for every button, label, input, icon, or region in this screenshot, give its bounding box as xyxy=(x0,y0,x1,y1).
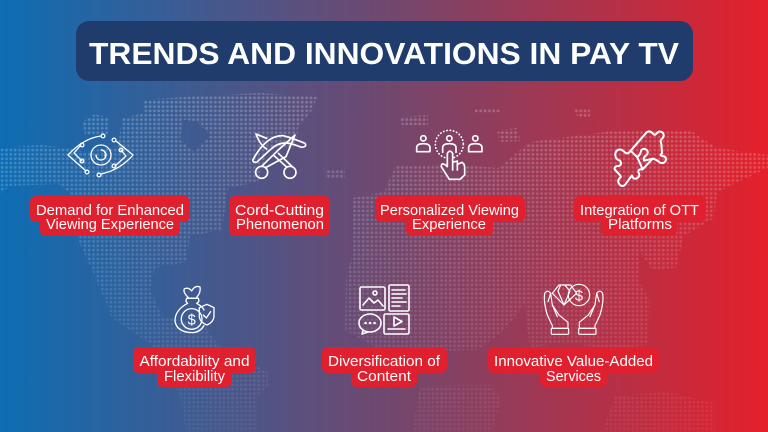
label: Experience xyxy=(412,217,486,233)
icon: hands holding gem and coin: $ xyxy=(575,289,583,305)
icon: puzzle pieces xyxy=(615,131,666,186)
label xyxy=(133,347,256,387)
item: Personalized Viewing Experience xyxy=(375,130,525,236)
label: Cord-Cutting xyxy=(235,203,324,219)
item: Cord-Cutting Phenomenon xyxy=(229,134,330,236)
label: Services xyxy=(546,369,601,385)
dotted world map xyxy=(0,93,768,432)
item: Innovative Value-Added Services xyxy=(488,284,659,387)
item: Affordability and Flexibility xyxy=(133,286,256,387)
label: Platforms xyxy=(608,217,672,233)
label xyxy=(574,196,706,236)
icon: money bag with shield: $ xyxy=(188,312,196,328)
label: Innovative Value-Added xyxy=(494,354,653,370)
title banner: TRENDS AND INNOVATIONS IN PAY TV xyxy=(89,36,679,71)
label xyxy=(488,347,659,387)
item: Diversification of Content xyxy=(322,285,447,387)
label: Affordability and xyxy=(140,354,250,370)
title banner xyxy=(76,21,693,81)
label: Diversification of xyxy=(328,354,441,370)
label: Integration of OTT xyxy=(580,203,699,219)
label: Content xyxy=(357,369,411,385)
item: Integration of OTT Platforms xyxy=(574,131,706,236)
label: Demand for Enhanced xyxy=(36,203,184,219)
label: Personalized Viewing xyxy=(380,203,519,219)
icon: scissors cutting cord xyxy=(253,134,306,178)
label xyxy=(30,196,190,236)
icon: people and pointing hand xyxy=(417,130,482,179)
label xyxy=(322,347,447,387)
icon: media content tiles xyxy=(359,285,409,334)
label: Phenomenon xyxy=(236,217,324,233)
label: Viewing Experience xyxy=(46,217,174,233)
icon: hands holding gem and coin xyxy=(544,284,603,334)
label: Flexibility xyxy=(164,369,226,385)
icon: circuit eye xyxy=(68,134,133,177)
label xyxy=(375,196,525,236)
item: Demand for Enhanced Viewing Experience xyxy=(30,134,190,236)
label xyxy=(229,196,330,236)
